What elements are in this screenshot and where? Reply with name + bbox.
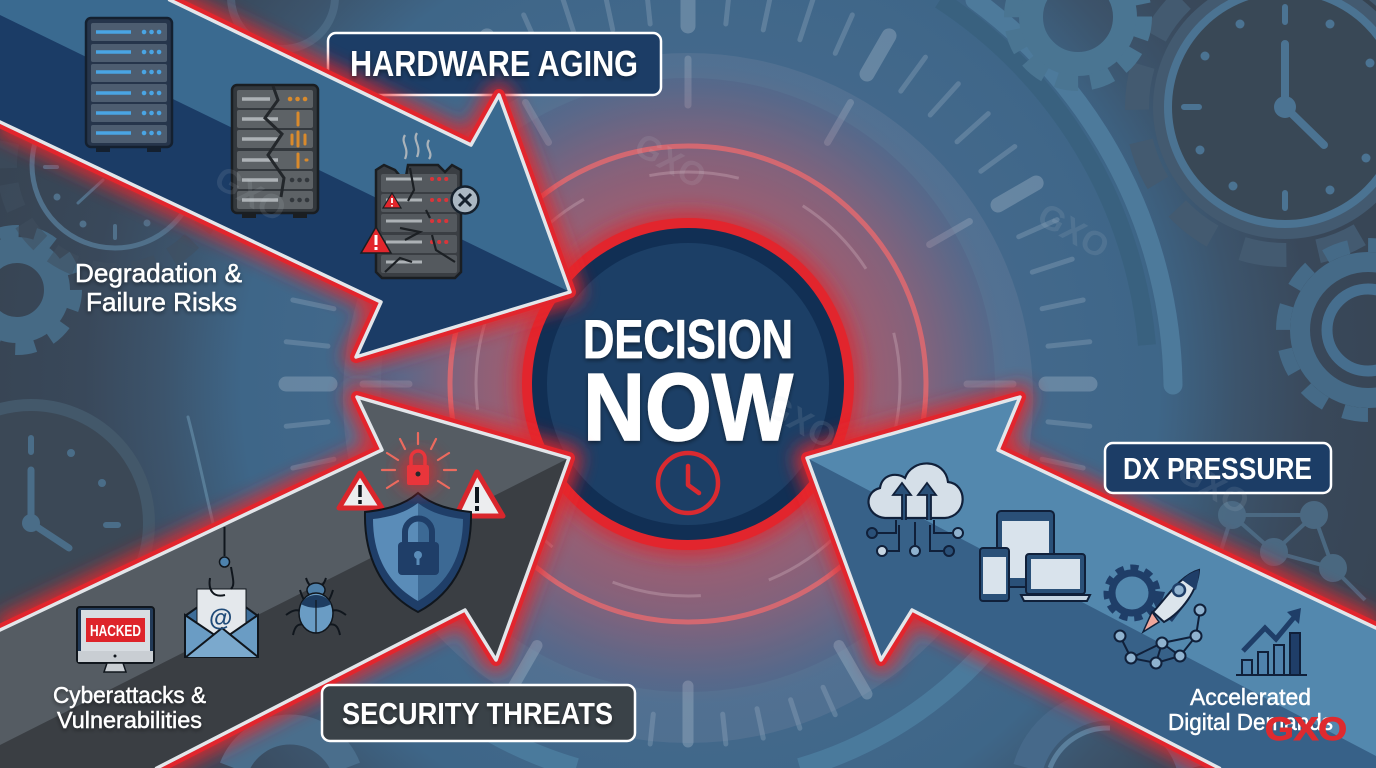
- icon: gear and rocket: [1107, 568, 1206, 668]
- watermarks: faint: [208, 126, 1255, 523]
- icon: cloud upload: [867, 463, 963, 556]
- label: dx pressure: DX PRESSURE: [1123, 451, 1312, 486]
- label: hardware aging: [328, 33, 661, 95]
- label: security threats: [322, 685, 635, 741]
- icon: healthy server: [86, 18, 172, 152]
- icon: hacked monitor: [77, 607, 154, 672]
- icon: small warning: [383, 193, 401, 208]
- watermarks: faint: GXO: [628, 126, 712, 197]
- watermark: logo red: GXO: [1265, 711, 1347, 747]
- icon: hacked monitor: HACKED: [90, 623, 141, 640]
- background gauge ticks: inner: [363, 59, 1013, 384]
- icon: devices: [980, 511, 1090, 601]
- heading: decision: DECISION: [583, 308, 793, 370]
- watermarks: faint: GXO: [758, 386, 842, 457]
- icon: phishing email: [185, 527, 258, 657]
- icon: x badge: [452, 186, 478, 214]
- background clock: lower left: [0, 405, 149, 641]
- background clock: upper left: [7, 57, 223, 273]
- text: accelerated digital demands: [1168, 684, 1333, 735]
- text: degradation and failure risks: Degradation &: [75, 258, 242, 288]
- icon: phishing email: @: [209, 605, 232, 632]
- background gauge ticks: major: [286, 0, 1090, 742]
- label: security threats: SECURITY THREATS: [342, 696, 613, 731]
- icon: failed server: [361, 133, 478, 278]
- icon: cracked server: [232, 85, 318, 218]
- arrow: hardware aging: [0, 0, 600, 370]
- icon: steam: [404, 133, 430, 159]
- background ring fragment: top: [231, 0, 335, 49]
- label text: hardware aging: HARDWARE AGING: [350, 43, 638, 84]
- text: cyberattacks and vulnerabilities: Cyberattacks &: [53, 682, 206, 708]
- icon: shield with lock: [365, 493, 471, 612]
- text: degradation and failure risks: Failure Risks: [86, 287, 237, 317]
- arrow: security threats: [0, 390, 600, 768]
- text: accelerated digital demands: Accelerated: [1190, 684, 1311, 710]
- icon label: hacked: [86, 618, 145, 642]
- icon: bug: [286, 578, 346, 635]
- background network nodes: [1218, 503, 1365, 600]
- text: degradation and failure risks: [75, 258, 242, 317]
- icon: warning triangle right: [456, 472, 503, 516]
- text: accelerated digital demands: Digital Demands: [1168, 709, 1333, 735]
- watermarks: faint: GXO: [1171, 452, 1255, 523]
- watermarks: faint: GXO: [1031, 196, 1115, 267]
- text: cyberattacks and vulnerabilities: [53, 682, 206, 733]
- background clock: upper right: [1137, 0, 1376, 255]
- arrow: dx pressure: [800, 390, 1376, 768]
- label: dx pressure: [1105, 443, 1331, 493]
- text: cyberattacks and vulnerabilities: Vulnerabilities: [57, 707, 202, 733]
- icon: warning triangle left: [339, 473, 382, 508]
- center circle: [516, 212, 860, 556]
- icon: alert red lock: [382, 433, 456, 492]
- background gauge ticks: minor: [286, 0, 1090, 744]
- icon: growth chart: [1236, 608, 1307, 675]
- heading: now: NOW: [583, 354, 793, 461]
- red radial glow and rings: [368, 64, 1008, 704]
- watermarks: faint: GXO: [208, 159, 292, 230]
- icon: clock: [658, 453, 718, 513]
- icon: large warning: [361, 227, 391, 253]
